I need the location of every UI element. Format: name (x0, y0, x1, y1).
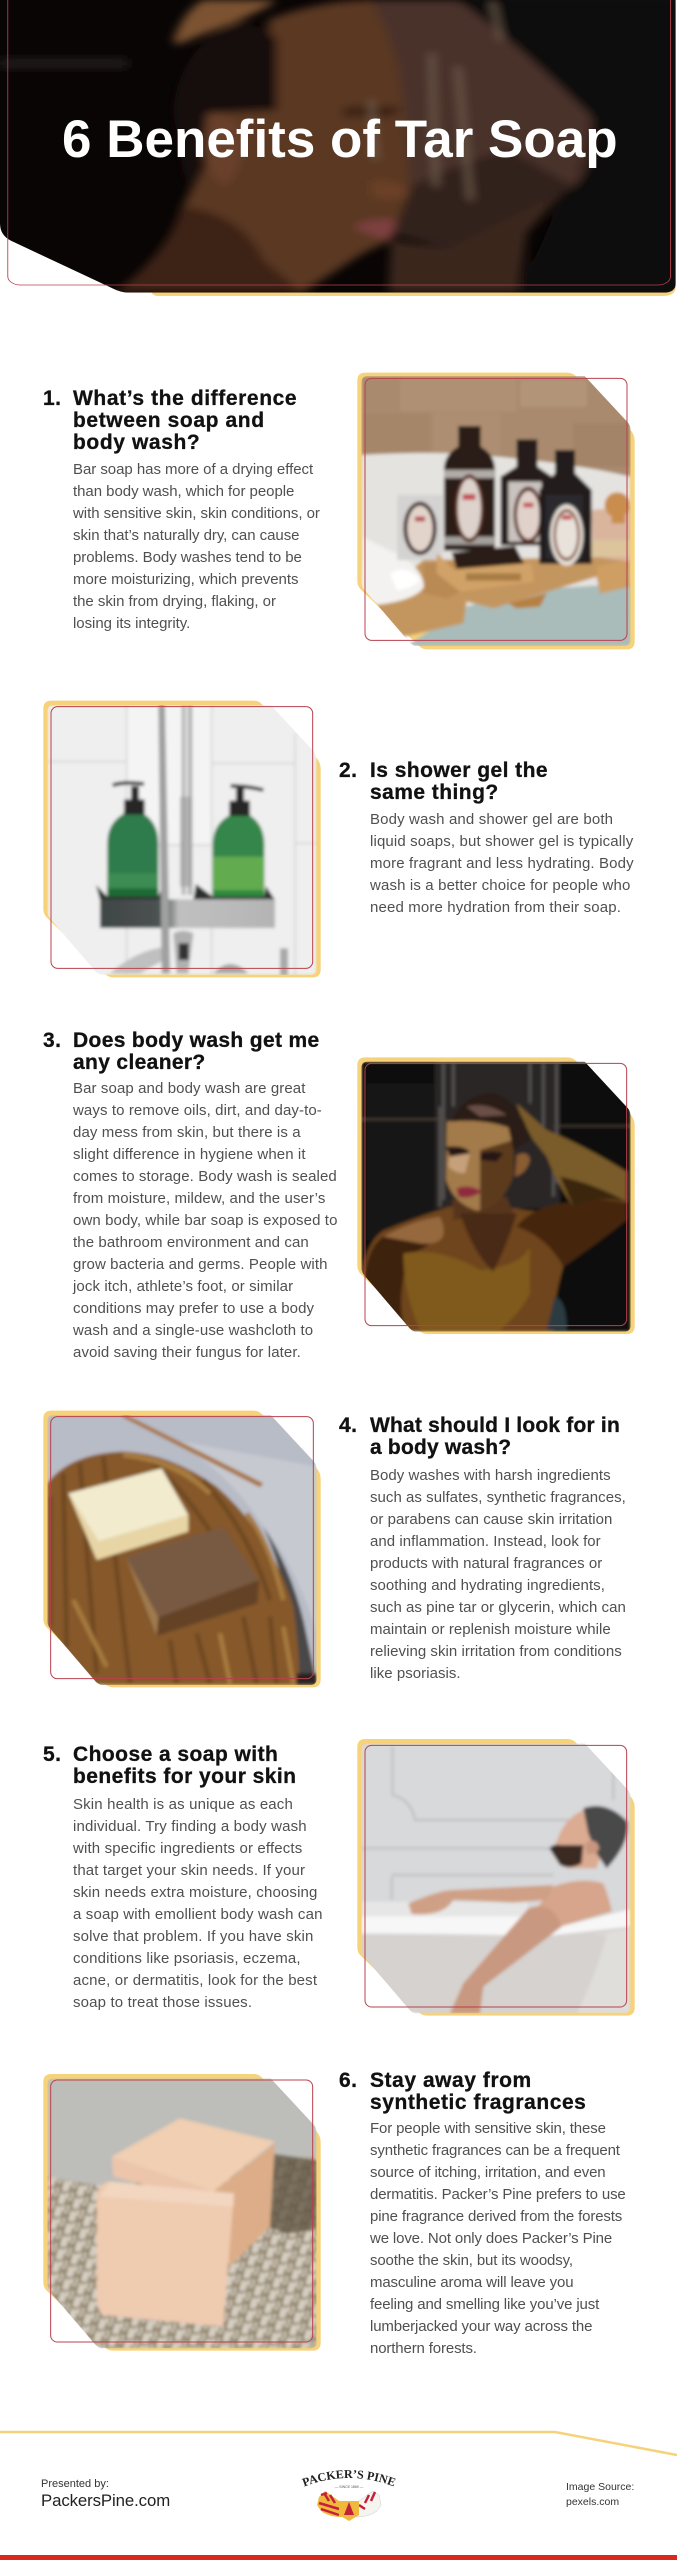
section 3 body: conditions may prefer to use a body (73, 1300, 314, 1317)
image source: Image Source: (566, 2481, 634, 2493)
section 6 heading: synthetic fragrances (370, 2091, 586, 2114)
section 3 heading (73, 1029, 320, 1074)
section 5 body: soap to treat those issues. (73, 1994, 252, 2011)
section 4 body: such as pine tar or glycerin, which can (370, 1599, 626, 1616)
section 1 heading: between soap and (73, 409, 265, 432)
section 6 body: feeling and smelling like you’ve just (370, 2296, 599, 2313)
presented by: PackersPine.com (41, 2491, 170, 2510)
section 3 number: 3. (43, 1029, 61, 1052)
photo: man in bathtub (357, 1739, 635, 2016)
section 6 heading: Stay away from (370, 2069, 532, 2092)
section 1 heading: What’s the difference (73, 387, 297, 410)
section 5 body: Skin health is as unique as each (73, 1796, 293, 1813)
section 5 body: acne, or dermatitis, look for the best (73, 1972, 317, 1989)
section 2 body (370, 811, 634, 916)
section 3 body: own body, while bar soap is exposed to (73, 1212, 338, 1229)
presented by (41, 2478, 170, 2510)
section 5 text (43, 1743, 323, 2011)
section 6 body: northern forests. (370, 2340, 477, 2357)
section 6 body: masculine aroma will leave you (370, 2274, 573, 2291)
section 1 body: losing its integrity. (73, 615, 190, 632)
section 1 body: than body wash, which for people (73, 483, 294, 500)
section 5 body: conditions like psoriasis, eczema, (73, 1950, 301, 1967)
section 2 body: more fragrant and less hydrating. Body (370, 855, 634, 872)
section 4 body: soothing and hydrating ingredients, (370, 1577, 605, 1594)
section 1 body: skin that’s naturally dry, can cause (73, 527, 299, 544)
header banner (0, 0, 676, 296)
section 3 body (72, 1080, 338, 1361)
section 3 body: wash and a single-use washcloth to (73, 1322, 313, 1339)
section 1 body: problems. Body washes tend to be (73, 549, 302, 566)
section 6 body: dermatitis. Packer’s Pine prefers to use (370, 2186, 626, 2203)
section 2 heading: same thing? (370, 781, 499, 804)
section 5 number: 5. (43, 1743, 61, 1766)
section 4 body: and inflammation. Instead, look for (370, 1533, 601, 1550)
section 1 text (43, 387, 320, 632)
section 4 body: maintain or replenish moisture while (370, 1621, 611, 1638)
section 3 heading: any cleaner? (73, 1051, 206, 1074)
section 5 heading: Choose a soap with (73, 1743, 278, 1766)
section 4 heading (370, 1414, 620, 1459)
section 3 body: Bar soap and body wash are great (73, 1080, 306, 1097)
section 4 heading: What should I look for in (370, 1414, 620, 1437)
section 4 body: or parabens can cause skin irritation (370, 1511, 612, 1528)
section 1 body (73, 461, 320, 632)
section 6 body: we love. Not only does Packer’s Pine (370, 2230, 612, 2247)
section 4 body: products with natural fragrances or (370, 1555, 602, 1572)
section 5 body (73, 1796, 323, 2011)
section 6 heading (370, 2069, 586, 2114)
section 5 body: that target your skin needs. If your (73, 1862, 305, 1879)
section 6 body (370, 2120, 626, 2357)
section 3 body: avoid saving their fungus for later. (73, 1344, 301, 1361)
section 3 body: grow bacteria and germs. People with (73, 1256, 328, 1273)
section 5 body: solve that problem. If you have skin (73, 1928, 314, 1945)
section 4 text (339, 1414, 626, 1682)
logo: PACKER’S PINE (302, 2470, 396, 2486)
section 6 body: synthetic fragrances can be a frequent (370, 2142, 620, 2159)
section 5 body: a soap with emollient body wash can (73, 1906, 323, 1923)
photo: green pump bottles (43, 700, 321, 978)
section 4 body: such as sulfates, synthetic fragrances, (370, 1489, 626, 1506)
logo: — SINCE 1869 — (335, 2485, 364, 2489)
section 3 body: ways to remove oils, dirt, and day-to- (73, 1102, 322, 1119)
section 1 body: with sensitive skin, skin conditions, or (73, 505, 320, 522)
section 3 body: jock itch, athlete’s foot, or similar (73, 1278, 293, 1295)
section 6 body: source of itching, irritation, and even (370, 2164, 606, 2181)
section 1 body: the skin from drying, flaking, or (73, 593, 276, 610)
section 1 heading (72, 387, 297, 454)
section 2 body: need more hydration from their soap. (370, 899, 621, 916)
section 2 body: Body wash and shower gel are both (370, 811, 613, 828)
section 6 number: 6. (339, 2069, 357, 2092)
section 5 heading (73, 1743, 296, 1788)
section 3 body: the bathroom environment and can (73, 1234, 309, 1251)
bottom red bar (0, 2555, 677, 2560)
section 4 body (370, 1467, 626, 1682)
section 6 text (339, 2069, 626, 2357)
title: 6 Benefits of Tar Soap (62, 110, 618, 169)
section 5 body: individual. Try finding a body wash (73, 1818, 307, 1835)
section 6 body: pine fragrance derived from the forests (370, 2208, 622, 2225)
photo: man in shower (357, 1057, 635, 1334)
section 3 body: slight difference in hygiene when it (73, 1146, 306, 1163)
section 2 heading (370, 759, 548, 804)
image source (566, 2481, 634, 2508)
section 5 body: with specific ingredients or effects (73, 1840, 302, 1857)
section 3 heading: Does body wash get me (73, 1029, 320, 1052)
section 2 heading: Is shower gel the (370, 759, 548, 782)
section 4 number: 4. (339, 1414, 357, 1437)
section 2 number: 2. (339, 759, 357, 782)
section 3 text (43, 1029, 338, 1361)
section 1 number: 1. (43, 387, 61, 410)
section 1 heading: body wash? (73, 431, 200, 454)
photo: soap bars on wooden board (43, 1410, 321, 1688)
presented by: Presented by: (41, 2478, 109, 2490)
section 4 body: like psoriasis. (370, 1665, 461, 1682)
section 4 body: Body washes with harsh ingredients (370, 1467, 611, 1484)
section 2 text (339, 759, 634, 916)
section 3 body: day mess from skin, but there is a (73, 1124, 301, 1141)
section 6 body: lumberjacked your way across the (370, 2318, 592, 2335)
section 3 body: comes to storage. Body wash is sealed (73, 1168, 337, 1185)
section 6 body: soothe the skin, but its woodsy, (370, 2252, 573, 2269)
section 1 body: more moisturizing, which prevents (73, 571, 298, 588)
image source: pexels.com (566, 2496, 619, 2508)
section 5 body: skin needs extra moisture, choosing (73, 1884, 318, 1901)
section 4 heading: a body wash? (370, 1436, 511, 1459)
section 6 body: For people with sensitive skin, these (370, 2120, 606, 2137)
logo (302, 2470, 396, 2521)
photo: peach soap bars on netting (43, 2074, 321, 2351)
section 4 body: relieving skin irritation from conditions (370, 1643, 622, 1660)
photo: tar soap products (357, 372, 635, 650)
section 3 body: from moisture, mildew, and the user’s (73, 1190, 325, 1207)
footer divider line (0, 2430, 677, 2456)
section 1 body: Bar soap has more of a drying effect (73, 461, 313, 478)
section 5 heading: benefits for your skin (73, 1765, 296, 1788)
section 2 body: wash is a better choice for people who (370, 877, 630, 894)
section 2 body: liquid soaps, but shower gel is typically (370, 833, 633, 850)
